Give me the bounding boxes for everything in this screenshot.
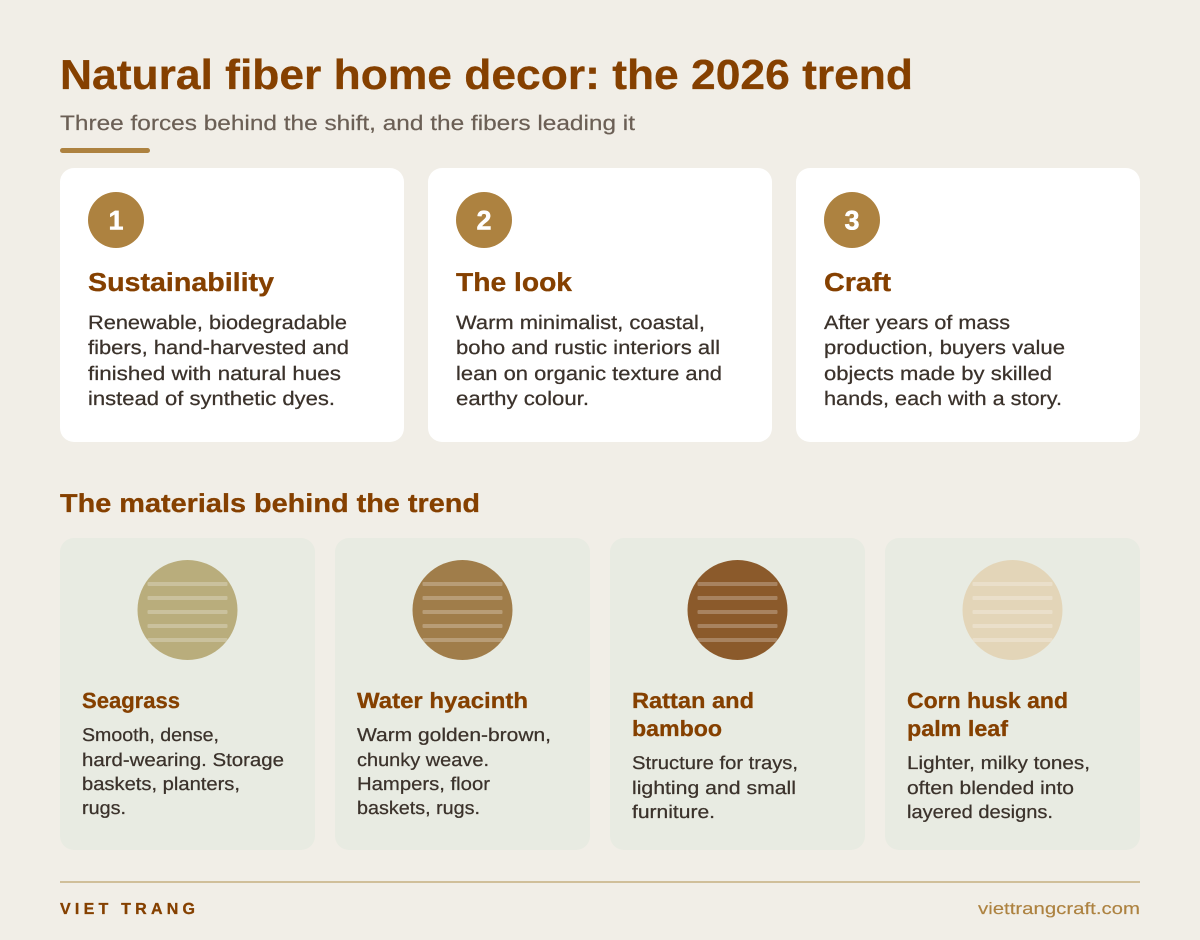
text: rattan body: furniture. — [632, 801, 715, 822]
text: craft body: hands, each with a story. — [824, 388, 1062, 410]
heading: water hyacinth: Water hyacinth — [357, 688, 528, 713]
text: water hyacinth body: baskets, rugs. — [357, 797, 480, 818]
text: water hyacinth body: Warm golden-brown, — [357, 724, 551, 745]
text: rattan body — [632, 752, 798, 822]
text: craft body: After years of mass — [824, 312, 1010, 334]
icon: number 1 — [88, 192, 144, 248]
icon: number 2 — [456, 192, 512, 248]
panel: corn husk and palm leaf — [885, 538, 1140, 850]
text: craft body: objects made by skilled — [824, 363, 1052, 385]
text: water hyacinth body: Hampers, floor — [357, 773, 490, 794]
icon: number 3: 3 — [844, 206, 860, 236]
text: the look body: earthy colour. — [456, 388, 589, 410]
heading: sustainability: Sustainability — [88, 267, 275, 297]
heading: corn husk and palm leaf: palm leaf — [907, 716, 1009, 741]
subtitle: Three forces behind the shift, and the fibers leading it — [60, 112, 635, 135]
text: rattan body: Structure for trays, — [632, 752, 798, 773]
text: water hyacinth body: chunky weave. — [357, 749, 489, 770]
footer url: viettrangcraft.com — [978, 900, 1140, 918]
heading: the look: The look — [456, 267, 573, 297]
text: craft body — [824, 312, 1065, 410]
text: corn husk body — [907, 752, 1090, 822]
icon: seagrass swatch — [138, 560, 238, 660]
icon: water hyacinth swatch — [412, 560, 512, 660]
text: sustainability body — [88, 312, 349, 410]
text: seagrass body: Smooth, dense, — [82, 724, 219, 745]
icon: number 3 — [824, 192, 880, 248]
panel: water hyacinth — [335, 538, 590, 850]
panel: craft — [796, 168, 1140, 442]
section heading: The materials behind the trend — [60, 488, 480, 518]
panel: the look — [428, 168, 772, 442]
heading: rattan and bamboo: Rattan and — [632, 688, 754, 713]
accent bar — [60, 148, 150, 153]
text: seagrass body: rugs. — [82, 797, 126, 818]
text: the look body — [456, 312, 722, 410]
heading: corn husk and palm leaf — [907, 688, 1068, 741]
text: rattan body: lighting and small — [632, 777, 796, 798]
panel: sustainability — [60, 168, 404, 442]
text: the look body: boho and rustic interiors all — [456, 337, 720, 359]
heading: rattan and bamboo — [632, 688, 754, 741]
text: the look body: Warm minimalist, coastal, — [456, 312, 705, 334]
text: seagrass body: hard-wearing. Storage — [82, 749, 284, 770]
footer brand: VIET TRANG — [60, 901, 195, 918]
title: Natural fiber home decor: the 2026 trend — [60, 51, 913, 98]
text: sustainability body: Renewable, biodegradable — [88, 312, 347, 334]
text: sustainability body: finished with natural hues — [88, 363, 341, 385]
icon: number 1: 1 — [108, 206, 124, 236]
icon: corn husk swatch — [962, 560, 1062, 660]
heading: seagrass: Seagrass — [82, 688, 180, 713]
text: seagrass body: baskets, planters, — [82, 773, 240, 794]
text: corn husk body: layered designs. — [907, 801, 1053, 822]
panel: rattan and bamboo — [610, 538, 865, 850]
text: sustainability body: instead of synthetic dyes. — [88, 388, 335, 410]
text: corn husk body: Lighter, milky tones, — [907, 752, 1090, 773]
text: the look body: lean on organic texture and — [456, 363, 722, 385]
panel: seagrass — [60, 538, 315, 850]
text: seagrass body — [82, 724, 284, 818]
icon: rattan swatch — [688, 560, 788, 660]
icon: number 2: 2 — [476, 206, 492, 236]
text: sustainability body: fibers, hand-harvested and — [88, 337, 349, 359]
heading: corn husk and palm leaf: Corn husk and — [907, 688, 1068, 713]
text: water hyacinth body — [357, 724, 551, 818]
heading: craft: Craft — [824, 267, 891, 297]
text: craft body: production, buyers value — [824, 337, 1065, 359]
heading: rattan and bamboo: bamboo — [632, 716, 722, 741]
text: corn husk body: often blended into — [907, 777, 1074, 798]
